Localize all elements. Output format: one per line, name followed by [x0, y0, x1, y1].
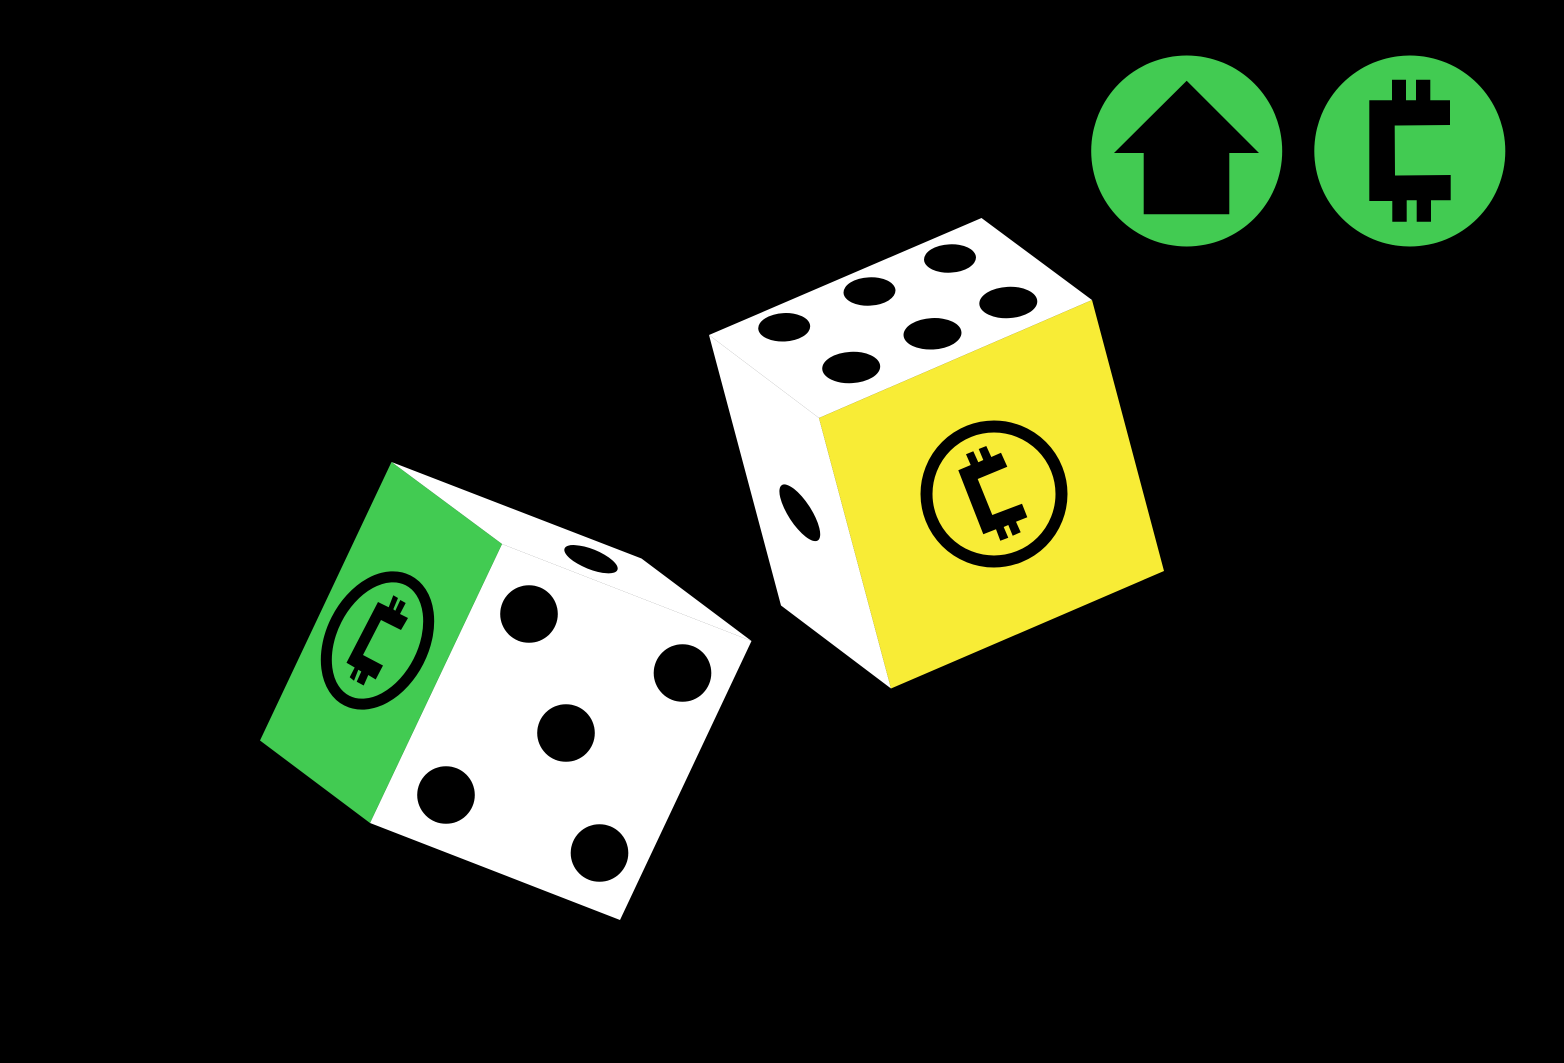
bitcoin glyph: [1369, 80, 1451, 222]
coin ring: [306, 559, 449, 722]
coin ring: [926, 426, 1062, 562]
pip: top face: [561, 539, 621, 579]
circle background: [1091, 56, 1282, 246]
face: top white: [392, 462, 752, 641]
bitcoin glyph: [958, 446, 1027, 541]
circle background: [1314, 56, 1505, 246]
face: left white: [709, 335, 891, 688]
face: top white: [709, 218, 1092, 418]
face: front white: [370, 544, 752, 920]
face: side green: [260, 462, 502, 823]
icon: bitcoin coin on yellow face: [926, 426, 1062, 562]
up arrow: [1114, 81, 1259, 214]
face: front yellow: [819, 300, 1164, 688]
pips: top face six: [757, 243, 1038, 385]
icon: bitcoin coin on green face: [306, 559, 449, 722]
die: left, green face: [260, 462, 752, 920]
pip: left face: [772, 479, 827, 547]
die: right, yellow face: [709, 218, 1164, 688]
icon: green circle with bitcoin glyph: [1314, 56, 1505, 246]
icon: green circle with up arrow: [1091, 56, 1282, 246]
pips: front face five: [417, 585, 711, 882]
bitcoin glyph: [346, 595, 408, 686]
